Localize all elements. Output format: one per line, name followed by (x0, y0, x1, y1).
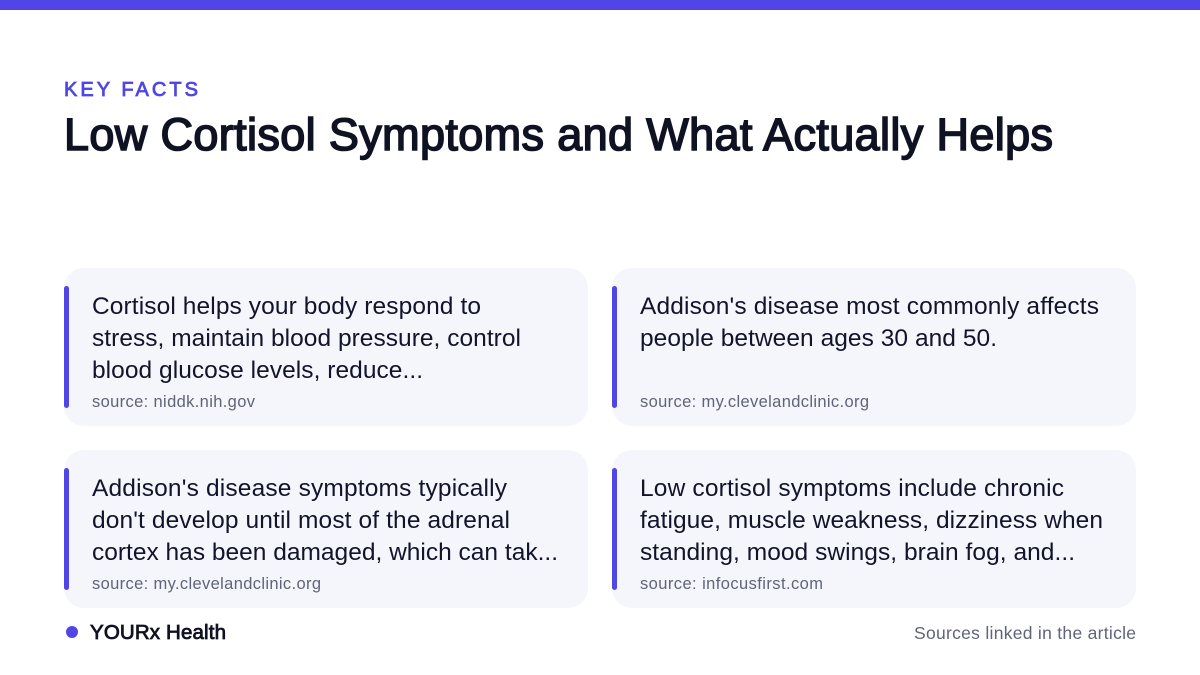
fact text: blood glucose levels, reduce... (92, 357, 423, 384)
fact text (640, 293, 1099, 352)
panel: age range fact (612, 268, 1136, 426)
fact text: standing, mood swings, brain fog, and... (640, 539, 1075, 566)
accent bar (64, 286, 69, 408)
title: Low Cortisol Symptoms and What Actually Helps (64, 109, 1053, 160)
source: source: infocusfirst.com (640, 575, 823, 593)
footer note: Sources linked in the article (914, 623, 1136, 643)
fact text (92, 475, 558, 566)
fact text: Addison's disease symptoms typically (92, 475, 508, 502)
brand name: YOURx Health (90, 621, 226, 644)
accent bar (612, 468, 617, 590)
fact text: Addison's disease most commonly affects (640, 293, 1099, 320)
fact text: cortex has been damaged, which can tak... (92, 539, 558, 566)
fact text: Cortisol helps your body respond to (92, 293, 481, 320)
fact text (640, 475, 1103, 566)
panel: cortisol function fact (64, 268, 588, 426)
fact text: people between ages 30 and 50. (640, 325, 997, 352)
accent bar (612, 286, 617, 408)
brand footer (66, 621, 226, 644)
source: source: my.clevelandclinic.org (640, 393, 869, 411)
accent bar (64, 468, 69, 590)
source: source: niddk.nih.gov (92, 393, 256, 411)
panel: symptom onset fact (64, 450, 588, 608)
fact text: stress, maintain blood pressure, control (92, 325, 521, 352)
eyebrow: key facts: KEY FACTS (64, 79, 198, 101)
top accent bar (0, 0, 1200, 10)
fact text (92, 293, 521, 384)
fact text: Low cortisol symptoms include chronic (640, 475, 1064, 502)
panel: symptoms list fact (612, 450, 1136, 608)
fact text: don't develop until most of the adrenal (92, 507, 510, 534)
source: source: my.clevelandclinic.org (92, 575, 321, 593)
icon: brand dot (66, 626, 78, 638)
fact text: fatigue, muscle weakness, dizziness when (640, 507, 1103, 534)
